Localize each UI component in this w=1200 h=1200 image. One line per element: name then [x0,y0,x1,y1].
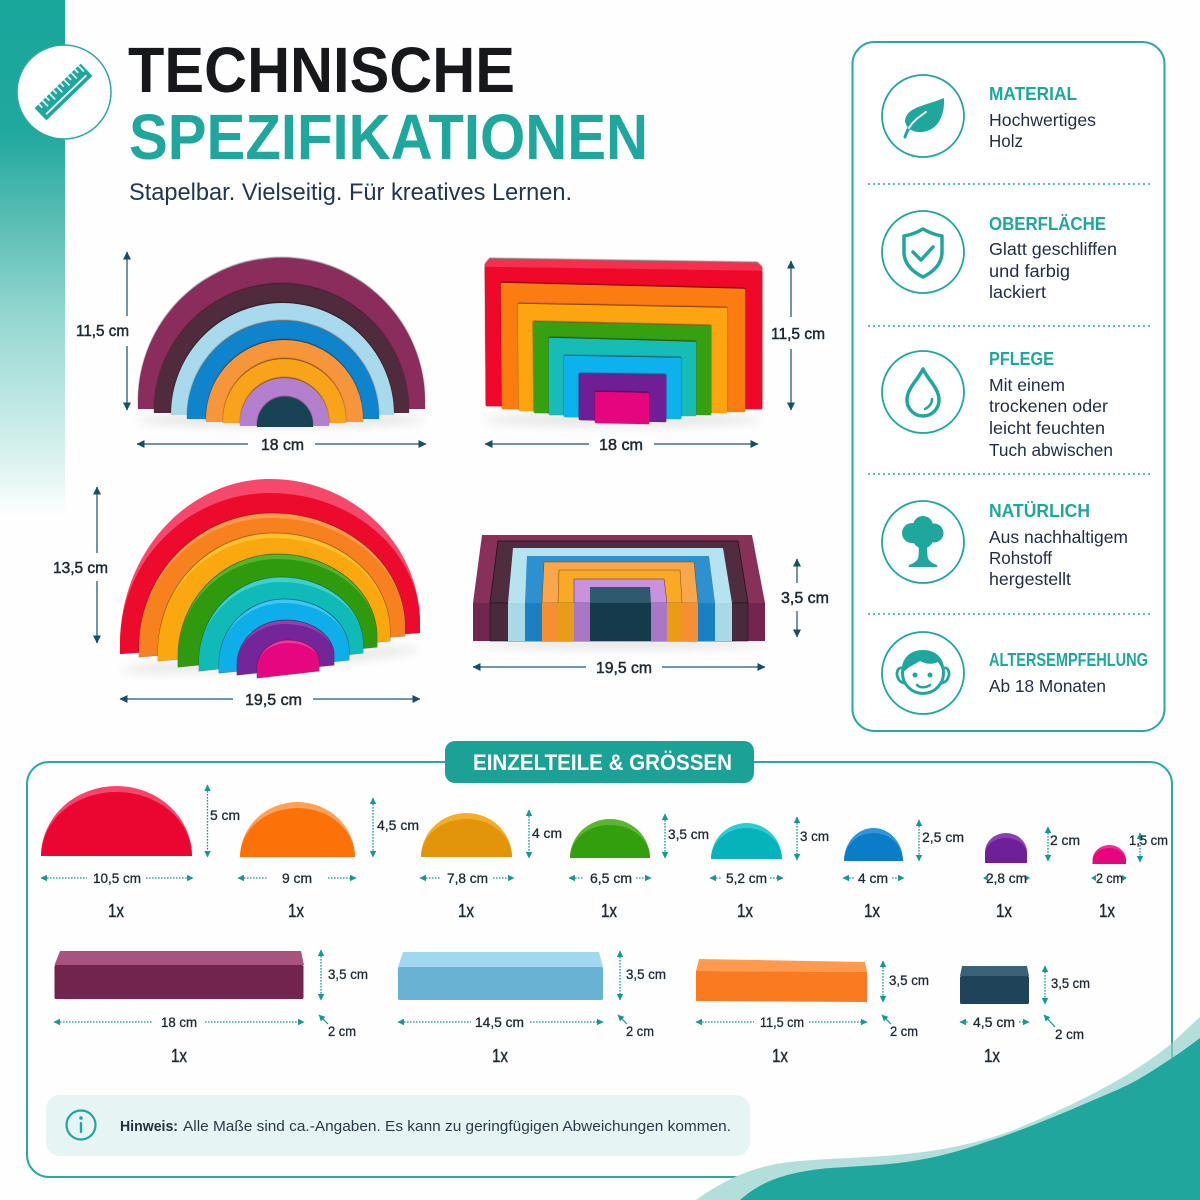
callout: note [46,1095,750,1156]
item: Oberfläche [882,211,1117,302]
piece: semicircle 5,2 cm: 5,2 cm [726,871,767,886]
subtitle: Stapelbar. Vielseitig. Für kreatives Lernen. [129,179,572,206]
piece: semicircle 7,8 cm [420,810,562,921]
icon: ruler badge [17,45,111,139]
piece: semicircle 7,8 cm: 7,8 cm [447,871,488,886]
piece: semicircle 5,2 cm: 3 cm [800,829,829,844]
dimension: flat stack height 3,5 cm: 3,5 cm [781,590,829,607]
product: dark rainbow arch stack [136,258,426,427]
item: Oberfläche: OBERFLÄCHE [989,213,1106,234]
title: TECHNISCHE [128,34,515,106]
item: Oberfläche: lackiert [989,282,1046,302]
item: Oberfläche: Glatt geschliffen [989,239,1117,259]
item: Pflege: trockenen oder [989,396,1108,416]
piece: orange block 11,5 cm: 3,5 cm [889,973,929,988]
piece: navy block 4,5 cm: 1x [984,1046,1000,1066]
title: SPEZIFIKATIONEN [129,101,648,173]
piece: navy block 4,5 cm: 2 cm [1055,1027,1084,1042]
dimension: flat stack width 19,5 cm: 19,5 cm [596,660,652,677]
callout: note: Alle Maße sind ca.-Angaben. Es kann zu geringfügigen Abweichungen kommen. [183,1118,731,1135]
piece: semicircle 7,8 cm: 4 cm [532,826,562,841]
piece: semicircle 5,2 cm: 1x [737,901,753,921]
piece: semicircle 2 cm: 2 cm [1096,871,1123,886]
item: Natürlich: Aus nachhaltigem [989,527,1128,547]
item: Pflege: leicht feuchten [989,418,1105,438]
item: Natürlich: Rohstoff [989,548,1052,568]
product: bright rainbow arch stack [120,479,420,679]
item: Pflege: Mit einem [989,375,1065,395]
product: colourful rectangle stack [482,260,762,427]
left teal gradient band [0,0,65,520]
piece: semicircle 6,5 cm: 3,5 cm [668,827,709,842]
piece: semicircle 6,5 cm: 6,5 cm [590,871,632,886]
piece: semicircle 10,5 cm: 5 cm [210,808,240,823]
piece: semicircle 2,8 cm: 2,8 cm [986,871,1027,886]
dimension: rectangle stack height 11,5 cm: 11,5 cm [771,326,825,343]
item: Pflege: PFLEGE [989,348,1054,369]
item: Oberfläche: und farbig [989,261,1070,281]
piece: orange block 11,5 cm: 2 cm [890,1024,918,1039]
piece: semicircle 4 cm: 4 cm [858,871,888,886]
piece: semicircle 2 cm: 1x [1099,901,1115,921]
piece: semicircle 10,5 cm [41,785,240,921]
piece: navy block 4,5 cm: 3,5 cm [1051,976,1090,991]
piece: semicircle 4 cm: 1x [864,901,880,921]
decorative wave: bottom right [696,1017,1200,1200]
item: Material: Hochwertiges [989,110,1096,130]
piece: semicircle 2,8 cm: 2 cm [1050,833,1080,848]
item: Natürlich [882,500,1128,589]
panel: product properties [852,42,1164,731]
piece: semicircle 2,8 cm [983,827,1080,921]
piece: plum block 18 cm: 2 cm [328,1024,356,1039]
piece: light blue block 14,5 cm: 3,5 cm [626,967,666,982]
piece: semicircle 7,8 cm: 1x [458,901,474,921]
piece: semicircle 4 cm [843,820,964,921]
item: Natürlich: NATÜRLICH [989,500,1090,521]
piece: semicircle 9 cm: 9 cm [282,871,312,886]
piece: plum block 18 cm: 1x [171,1046,187,1066]
title [128,34,648,173]
piece: light blue block 14,5 cm: 14,5 cm [475,1015,524,1030]
item: Natürlich: hergestellt [989,569,1071,589]
item: Pflege: Tuch abwischen [989,440,1113,460]
icon: info [66,1110,96,1140]
piece: semicircle 6,5 cm [569,814,709,921]
piece: semicircle 2 cm: 1,5 cm [1129,833,1168,848]
piece: semicircle 4 cm: 2,5 cm [922,830,964,845]
piece: light blue block 14,5 cm: 1x [492,1046,508,1066]
heading: Einzelteile & Größen: EINZELTEILE & GRÖSSEN [473,750,732,775]
heading: Einzelteile & Größen [445,741,754,783]
dimension: arch width 18 cm: 18 cm [261,437,304,454]
item: Altersempfehlung [882,632,1148,714]
piece: orange block 11,5 cm: 11,5 cm [760,1015,804,1030]
piece: semicircle 10,5 cm: 1x [108,901,124,921]
dimension: rectangle stack width 18 cm: 18 cm [599,437,643,454]
dimension: flat stack height 3,5 cm [781,559,829,637]
piece: orange block 11,5 cm: 1x [772,1046,788,1066]
piece: semicircle 2,8 cm: 1x [996,901,1012,921]
product: flat laid rectangle stack [473,535,765,649]
piece: semicircle 2 cm [1091,833,1168,921]
item: Pflege [882,348,1113,460]
piece: semicircle 6,5 cm: 1x [601,901,617,921]
dimension: bright arch height 13,5 cm: 13,5 cm [53,560,108,577]
dimension: arch height 11,5 cm: 11,5 cm [76,323,129,340]
item: Material: MATERIAL [989,83,1077,104]
piece: semicircle 9 cm: 4,5 cm [377,818,419,833]
dimension: bright arch width 19,5 cm: 19,5 cm [245,692,302,709]
item: Material [882,75,1096,157]
item: Altersempfehlung: Ab 18 Monaten [989,676,1106,696]
item: Material: Holz [989,131,1023,151]
piece: plum block 18 cm [54,950,368,1066]
piece: orange block 11,5 cm [696,959,929,1066]
piece: semicircle 5,2 cm [710,817,829,921]
piece: navy block 4,5 cm [960,966,1090,1066]
panel: single pieces outline [27,762,1172,1177]
piece: light blue block 14,5 cm: 2 cm [626,1024,654,1039]
piece: navy block 4,5 cm: 4,5 cm [973,1015,1015,1030]
piece: semicircle 9 cm: 1x [288,901,304,921]
item: Altersempfehlung: ALTERSEMPFEHLUNG [989,649,1148,670]
piece: plum block 18 cm: 3,5 cm [328,967,368,982]
piece: semicircle 10,5 cm: 10,5 cm [93,871,141,886]
piece: semicircle 9 cm [238,798,419,921]
piece: plum block 18 cm: 18 cm [161,1015,197,1030]
piece: light blue block 14,5 cm [398,951,666,1066]
callout: note: Hinweis: [120,1118,178,1135]
